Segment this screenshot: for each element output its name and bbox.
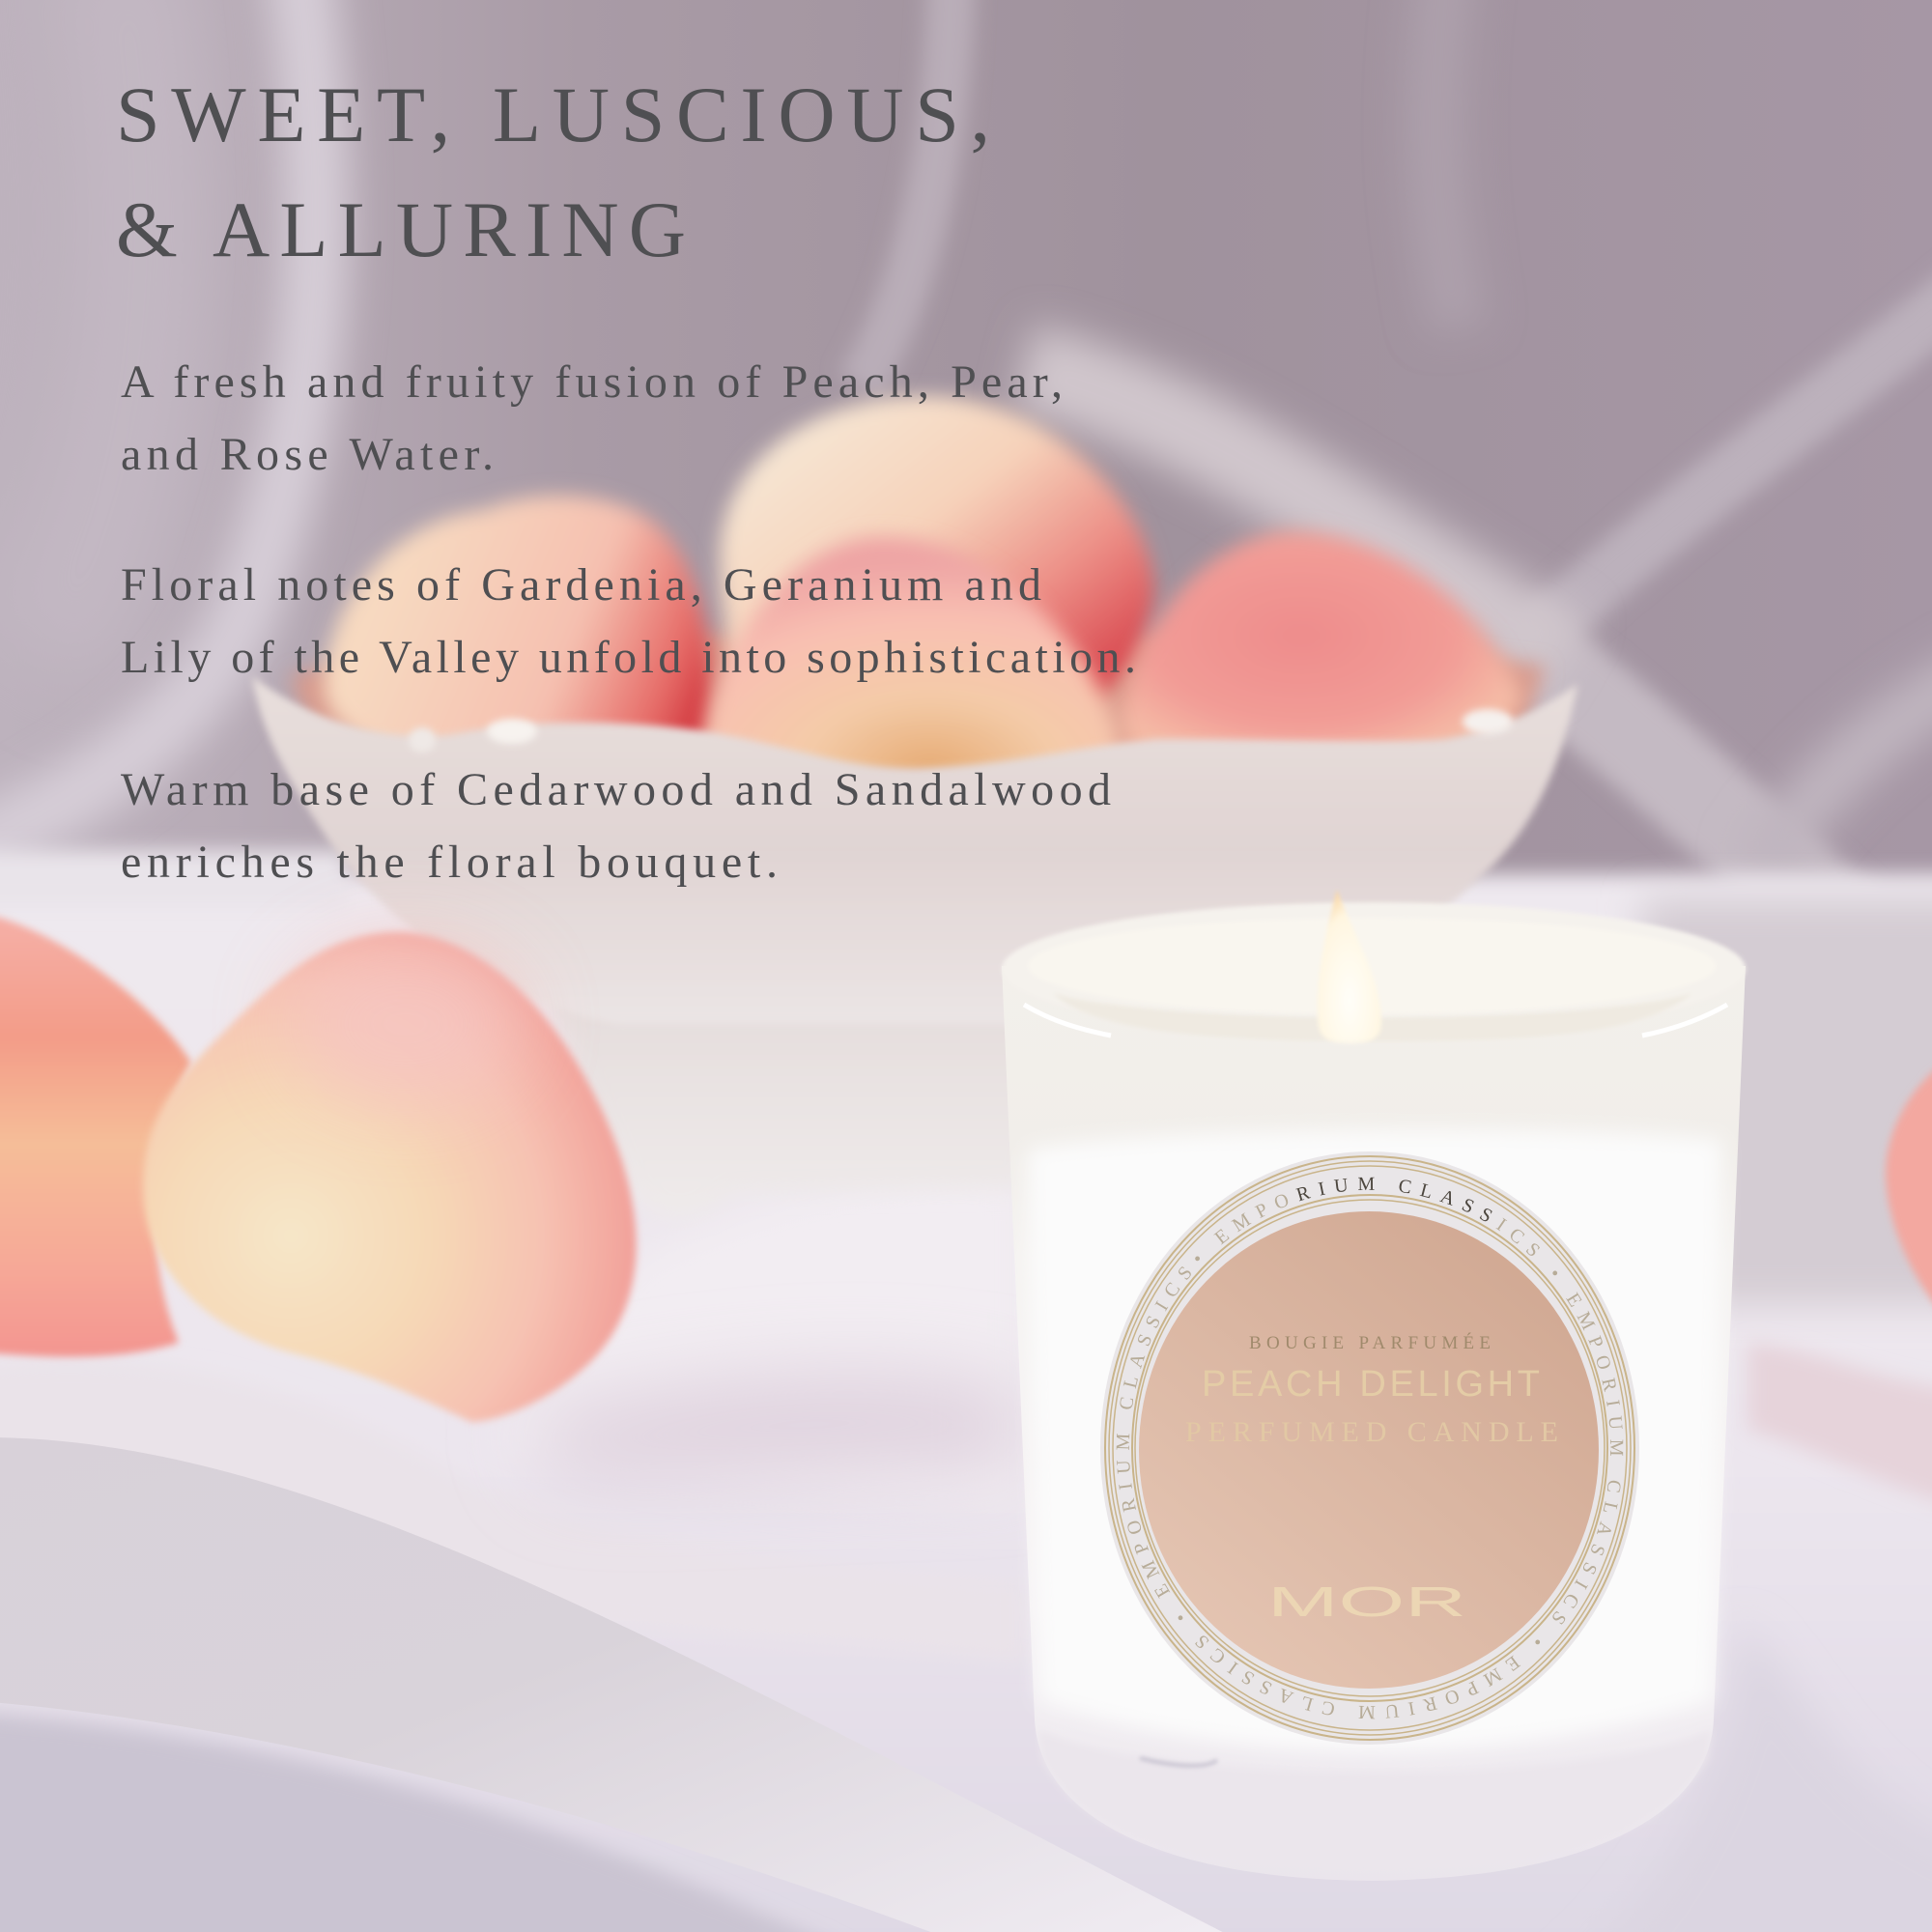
paragraph: floral notes (121, 559, 1136, 683)
paragraph: fruit notes: A fresh and fruity fusion of Peach, Pear, (121, 356, 1063, 408)
paragraph: base notes: enriches the floral bouquet. (121, 837, 778, 888)
heading (116, 71, 990, 273)
label product name: PEACH DELIGHT (1202, 1364, 1540, 1405)
paragraph: fruit notes (121, 356, 1063, 480)
label brand logo: MOR (1267, 1578, 1466, 1626)
jar base shadow (1038, 1729, 1712, 1870)
label descriptor: PERFUMED CANDLE (1185, 1416, 1558, 1448)
peach blush on top of hero peach (290, 942, 522, 1106)
heading: SWEET, LUSCIOUS, (116, 71, 990, 158)
heading: & ALLURING (116, 185, 686, 273)
rim highlight (1024, 1005, 1727, 1036)
label gold rings (1105, 1156, 1634, 1740)
label ring text: • EMPORIUM CLASSICS • EMPORIUM CLASSICS • EMPORIUM CLASSICS • EMPORIUM CLASSICS (1117, 1177, 1623, 1719)
scented candle (1002, 891, 1747, 1881)
body copy (121, 356, 1136, 888)
peach: cut off at left edge (0, 913, 191, 1356)
bowl peach: right (1121, 531, 1521, 763)
bowl body (252, 676, 1577, 1024)
foreground peaches (0, 913, 1932, 1422)
wax surface (1053, 993, 1692, 1041)
satin ribbon (0, 1437, 1241, 1932)
label peach centre (1139, 1211, 1599, 1689)
paragraph: base notes: Warm base of Cedarwood and Sandalwood (121, 764, 1111, 815)
paragraph: fruit notes: and Rose Water. (121, 429, 494, 480)
fruit bowl (252, 396, 1577, 1218)
paragraph: base notes (121, 764, 1111, 888)
paragraph: floral notes: Lily of the Valley unfold into sophistication. (121, 632, 1136, 683)
jar rim (1002, 902, 1746, 1036)
jar base highlight (1140, 1758, 1217, 1766)
flame (1318, 890, 1381, 1043)
bowl peach: front (697, 537, 1122, 782)
label outer disc (1100, 1151, 1639, 1745)
bowl rim highlights (409, 709, 1513, 753)
bowl back interior (290, 632, 1546, 773)
peach: right edge (1886, 1058, 1932, 1323)
tablecloth (0, 874, 1932, 1932)
jar opening (1028, 918, 1716, 1014)
peach: large hero peach (143, 932, 637, 1422)
label (1100, 1151, 1639, 1745)
wall backdrop (0, 0, 1932, 966)
label small line: BOUGIE PARFUMÉE (1249, 1332, 1491, 1353)
candle glass jar (1002, 966, 1746, 1881)
candle wax body (1028, 1130, 1721, 1750)
bowl peach: left (324, 496, 712, 763)
draped fabric folds (0, 0, 1932, 1053)
bowl stem (541, 985, 1053, 1218)
paragraph: floral notes: Floral notes of Gardenia, Geranium and (121, 559, 1041, 611)
bowl peach: large upper (720, 396, 1154, 734)
